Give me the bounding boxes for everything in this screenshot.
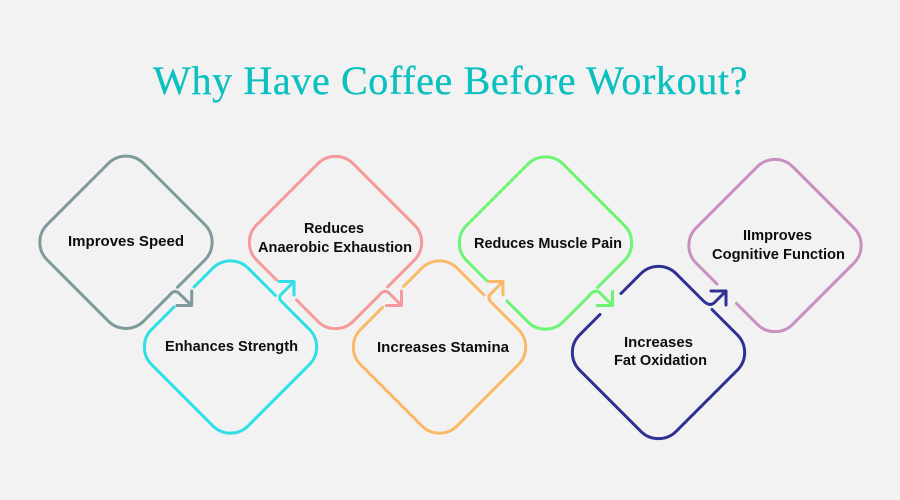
label: Reduces Anaerobic Exhaustion — [258, 221, 412, 256]
panel: Reduces Anaerobic Exhaustion — [249, 156, 422, 329]
outline and arrow: orange diamond — [353, 261, 526, 433]
label: Increases Stamina: Increases Stamina — [377, 340, 510, 356]
outline: purple diamond — [689, 159, 861, 332]
label: Increases Fat Oxidation — [614, 335, 707, 369]
panel: Reduces Muscle Pain — [459, 157, 632, 329]
label: Increases Fat Oxidation: Increases — [624, 335, 693, 351]
outline and arrow: navy diamond — [572, 266, 745, 439]
outline and arrow: pink diamond — [249, 156, 422, 329]
label: Improves Speed: Improves Speed — [68, 234, 184, 250]
panel: Enhances Strength — [144, 261, 317, 433]
label: Reduces Anaerobic Exhaustion: Reduces — [304, 221, 364, 237]
outline and arrow: cyan diamond — [144, 261, 317, 433]
outline and arrow: green diamond — [459, 157, 632, 329]
panel: IImproves Cognitive Function — [689, 159, 861, 332]
label: Reduces Muscle Pain: Reduces Muscle Pain — [474, 236, 622, 252]
panel: Improves Speed — [40, 156, 212, 328]
label: IImproves Cognitive Function: IImproves — [743, 228, 812, 244]
label: Reduces Anaerobic Exhaustion: Anaerobic Exhaustion — [258, 240, 412, 256]
panel: Increases Fat Oxidation — [572, 266, 745, 439]
panel: Increases Stamina — [353, 261, 526, 433]
label: IImproves Cognitive Function — [712, 228, 845, 263]
title: Why Have Coffee Before Workout? — [153, 58, 748, 103]
label: Enhances Strength: Enhances Strength — [165, 339, 298, 355]
label: Increases Fat Oxidation: Fat Oxidation — [614, 353, 707, 369]
label: IImproves Cognitive Function: Cognitive Function — [712, 247, 845, 263]
outline and arrow: gray diamond — [40, 156, 212, 328]
